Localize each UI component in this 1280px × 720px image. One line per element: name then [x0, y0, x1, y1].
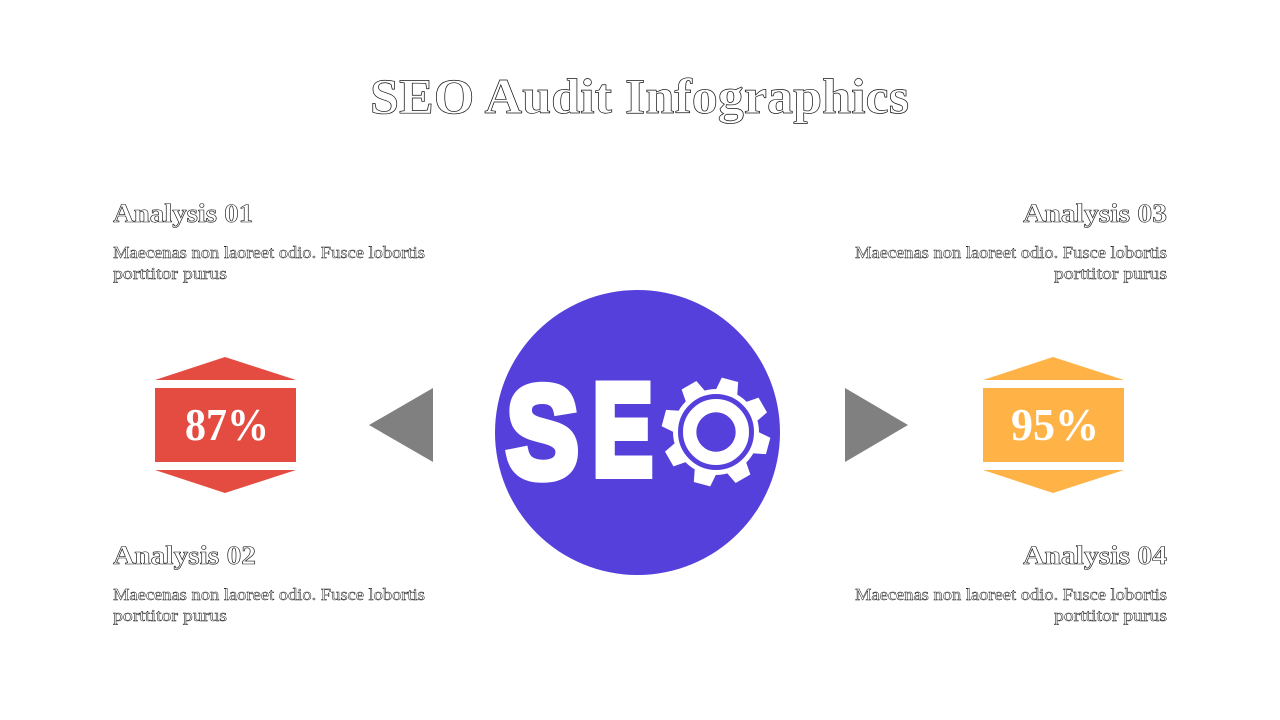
heading: Analysis 03: Analysis 03 — [1023, 199, 1167, 228]
title: SEO Audit Infographics — [370, 68, 909, 124]
description: Analysis 01: Maecenas non laoreet odio. Fusce lobortis — [113, 243, 425, 262]
arrow: right — [845, 388, 908, 462]
description: Analysis 02: porttitor purus — [113, 606, 227, 625]
badge: 95% — [983, 357, 1124, 493]
badge: 87% — [155, 357, 296, 493]
text block: Analysis 04 — [855, 541, 1167, 625]
central SEO emblem — [495, 290, 780, 575]
description: Analysis 01: porttitor purus — [113, 264, 227, 283]
icon: gear — [661, 377, 771, 487]
description: Analysis 04 — [855, 585, 1167, 625]
description: Analysis 03: porttitor purus — [1054, 264, 1167, 283]
description: Analysis 02 — [113, 585, 425, 625]
description: Analysis 03: Maecenas non laoreet odio. Fusce lobortis — [855, 243, 1167, 262]
text block: Analysis 02 — [113, 541, 425, 625]
description: Analysis 03 — [855, 243, 1167, 283]
logo letter E: E — [593, 356, 653, 502]
badge: 87%: 87% — [185, 399, 269, 450]
text block: Analysis 03 — [855, 199, 1167, 283]
description: Analysis 04: Maecenas non laoreet odio. Fusce lobortis — [855, 585, 1167, 604]
badge: 95%: 95% — [1011, 399, 1099, 450]
heading: Analysis 02: Analysis 02 — [113, 541, 256, 570]
text block: Analysis 01 — [113, 199, 425, 283]
heading: Analysis 04: Analysis 04 — [1023, 541, 1167, 570]
description: Analysis 01 — [113, 243, 425, 283]
heading: Analysis 01: Analysis 01 — [113, 199, 253, 228]
description: Analysis 04: porttitor purus — [1054, 606, 1167, 625]
emblem circle — [495, 290, 780, 575]
logo letter S: S — [506, 359, 578, 505]
arrow: left — [369, 388, 433, 462]
description: Analysis 02: Maecenas non laoreet odio. Fusce lobortis — [113, 585, 425, 604]
